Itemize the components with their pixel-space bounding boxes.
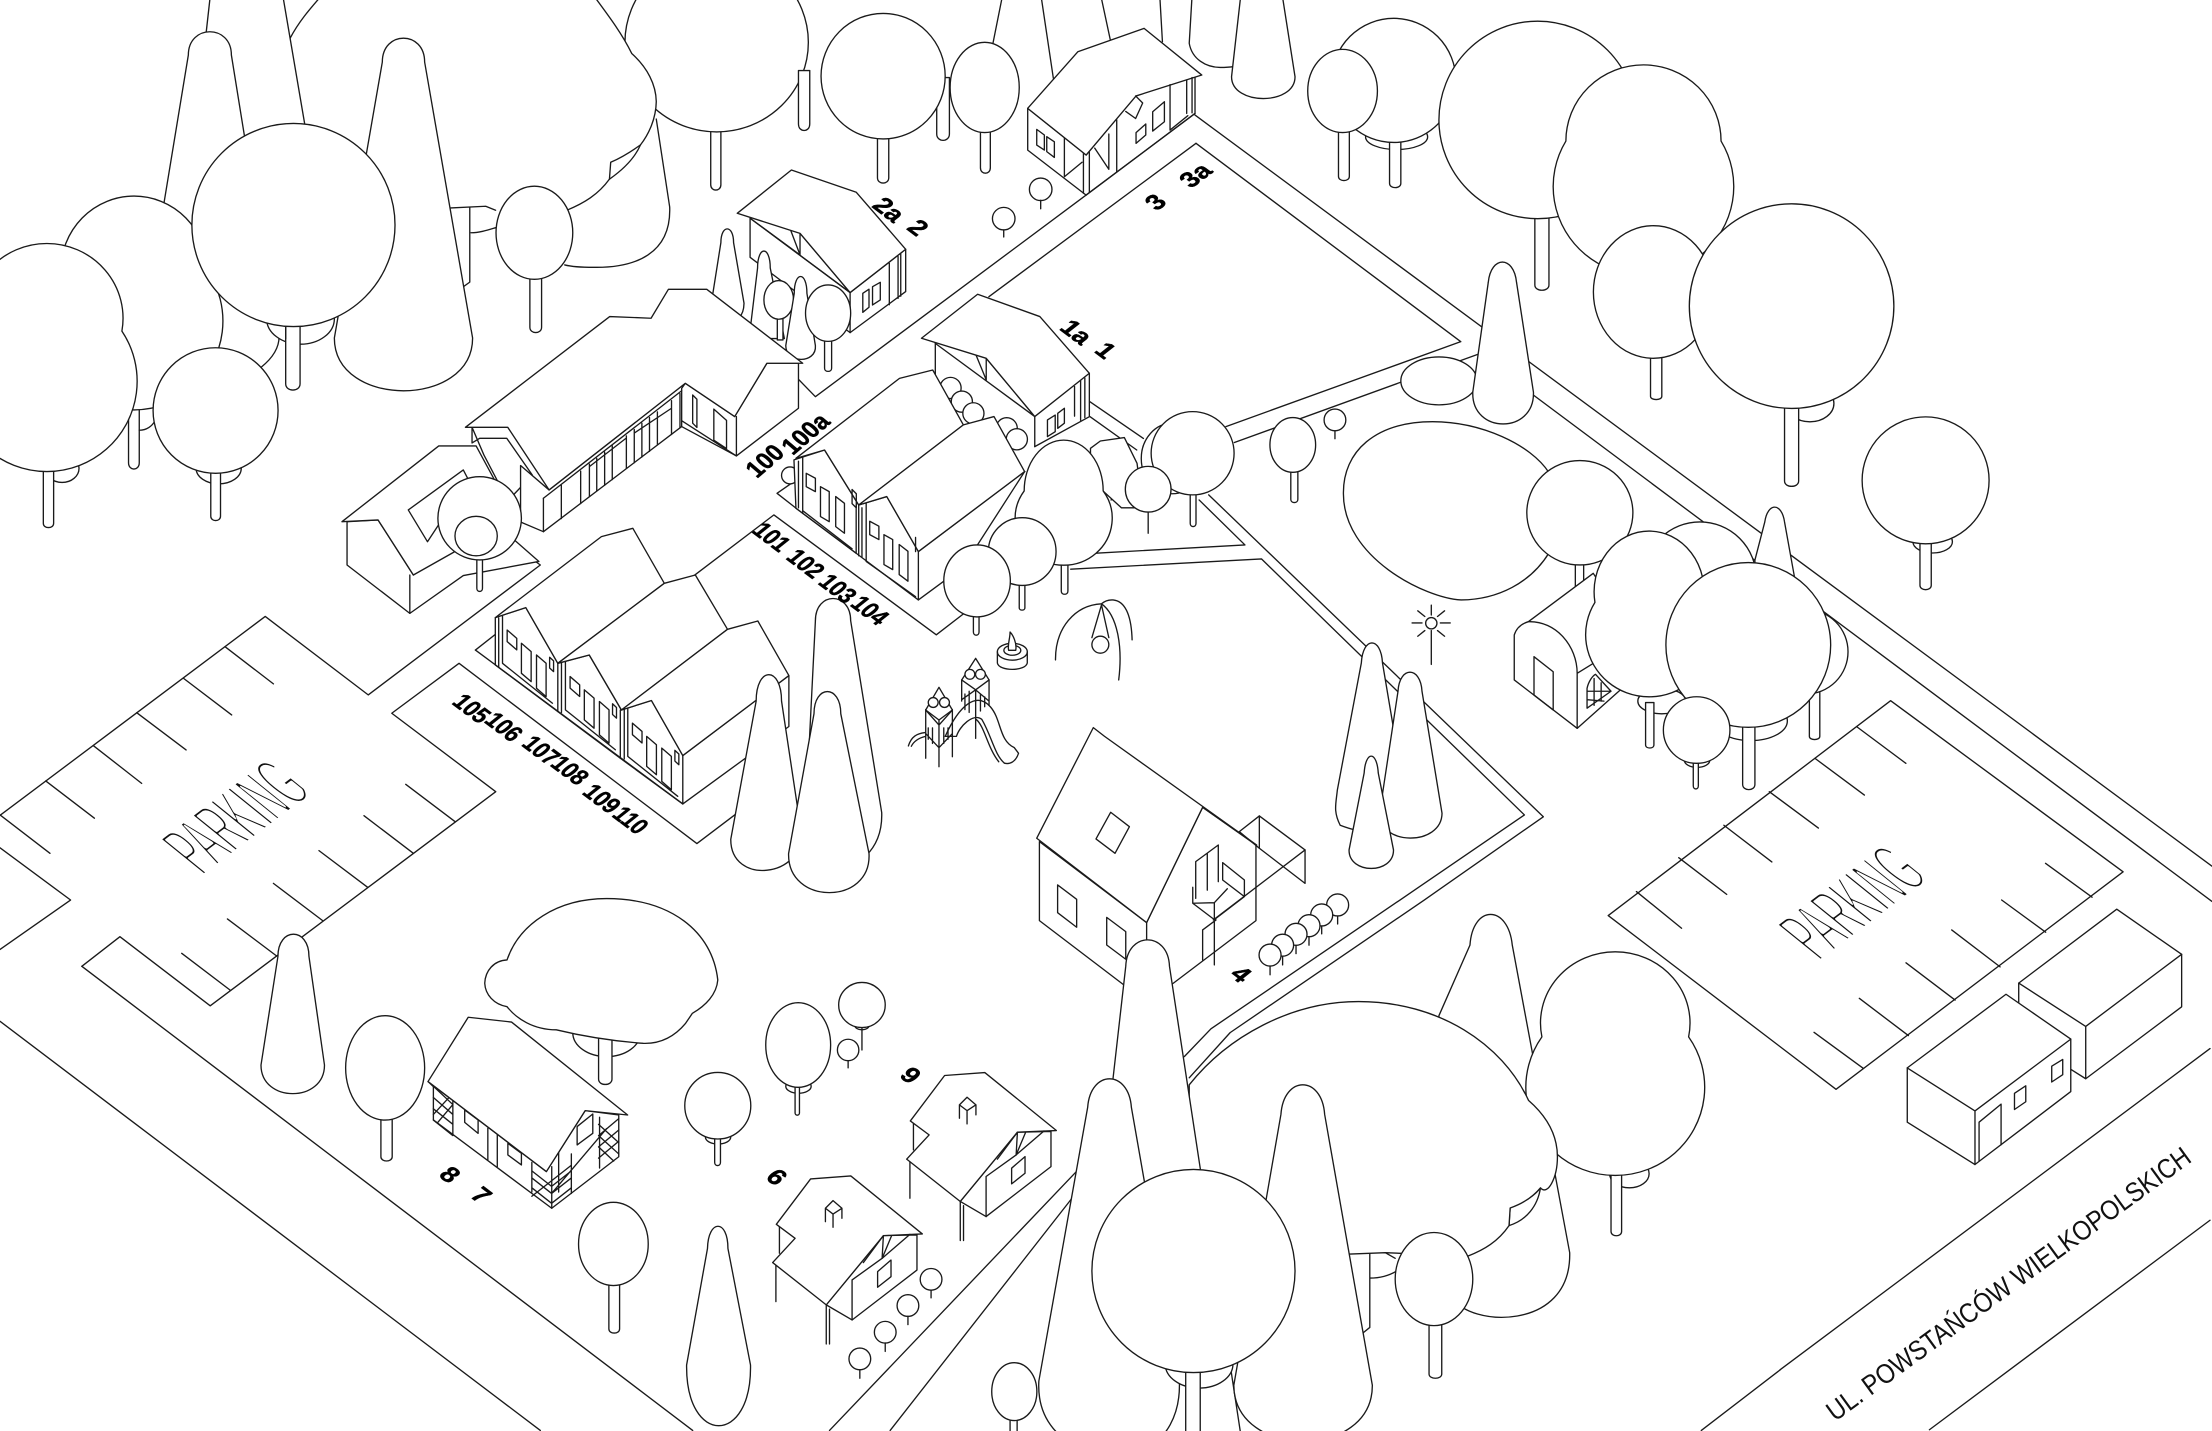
tree bbox=[579, 1202, 648, 1333]
pond behind cone bbox=[1401, 357, 1477, 405]
trees bottom right bbox=[992, 914, 1705, 1431]
tree left of house 8 bbox=[346, 1016, 425, 1161]
house 7 and 8 bbox=[428, 1017, 628, 1208]
label 9: 9 bbox=[894, 1063, 927, 1089]
cloud tree bbox=[1015, 440, 1112, 594]
trees centre right small bbox=[1270, 409, 1633, 600]
tree bbox=[685, 1072, 751, 1166]
cloud tree bbox=[1526, 952, 1705, 1236]
tree small bbox=[1663, 697, 1730, 789]
roof bbox=[737, 170, 906, 293]
tree bbox=[1862, 417, 1989, 590]
tree front left bbox=[0, 243, 137, 528]
bushes by house 1 bbox=[935, 377, 1027, 450]
fountain bbox=[997, 632, 1027, 669]
windows bbox=[465, 1110, 521, 1167]
door bbox=[1979, 1104, 2001, 1161]
roof bbox=[465, 289, 803, 490]
tree bbox=[766, 1003, 831, 1115]
tree bbox=[1308, 49, 1377, 181]
cone bbox=[749, 251, 784, 339]
back box bbox=[2019, 909, 2182, 1079]
lamp bbox=[1055, 600, 1132, 680]
unit details 3 bbox=[628, 709, 683, 804]
tree oval bbox=[950, 42, 1019, 173]
cone tall bbox=[1072, 940, 1241, 1431]
cone by road junction bbox=[1473, 262, 1533, 424]
tree small bbox=[1125, 466, 1171, 533]
label 8: 8 bbox=[433, 1162, 466, 1188]
label 4: 4 bbox=[1224, 962, 1257, 988]
frame lines bbox=[750, 218, 850, 333]
oval tree bbox=[1270, 418, 1316, 503]
playground bbox=[908, 658, 1019, 767]
tree bbox=[944, 545, 1010, 635]
cone right bbox=[1234, 1085, 1372, 1431]
unit details 1 bbox=[796, 457, 859, 556]
roof unit 2 bbox=[558, 575, 728, 710]
cone behind bbox=[1755, 507, 1794, 621]
tree back bbox=[1141, 423, 1203, 494]
label 106: 106 bbox=[478, 708, 528, 746]
house 1 and 1a bbox=[921, 294, 1089, 447]
side walls bbox=[521, 363, 798, 532]
trees top right bbox=[1308, 18, 1989, 590]
cone by parking bbox=[261, 934, 324, 1094]
tree bbox=[1666, 563, 1831, 790]
window bbox=[878, 1260, 891, 1287]
cloud tree bbox=[1586, 531, 1713, 748]
walls bbox=[495, 608, 789, 804]
side boxes bbox=[1907, 909, 2182, 1165]
label 100a: 100a bbox=[776, 408, 837, 460]
tree bbox=[837, 1039, 859, 1068]
tree bbox=[764, 281, 794, 340]
cone front bbox=[789, 692, 869, 893]
chimney bbox=[825, 1201, 842, 1227]
cone edges top bbox=[992, 0, 1162, 78]
tower front bbox=[926, 687, 952, 720]
roof bbox=[1037, 728, 1257, 923]
house 100 and 100a bbox=[465, 289, 803, 532]
roof back unit bbox=[796, 370, 963, 505]
annex connector bbox=[472, 427, 532, 501]
chimney bbox=[959, 1097, 976, 1124]
walls bbox=[794, 450, 1025, 600]
pond shape bbox=[1343, 422, 1549, 600]
lattice left bbox=[433, 1086, 453, 1136]
tree bbox=[1593, 226, 1713, 400]
houses 105 to 110 bbox=[475, 528, 789, 804]
small trees by house 3 bbox=[992, 178, 1052, 237]
cloud tree underside bbox=[609, 145, 640, 179]
window bbox=[1012, 1157, 1025, 1184]
walls bbox=[826, 1235, 917, 1320]
roof bbox=[907, 1073, 1056, 1201]
tree round bbox=[821, 13, 945, 183]
tree bbox=[839, 982, 885, 1050]
trees central cluster bbox=[944, 412, 1234, 635]
cones centre right bbox=[1336, 643, 1442, 868]
trees by house 2 bbox=[712, 229, 851, 371]
cone tree left bbox=[151, 32, 268, 282]
cloud tree top left bbox=[290, 0, 656, 210]
label 100: 100 bbox=[740, 440, 790, 483]
house 9 bbox=[907, 1073, 1056, 1241]
label 3: 3 bbox=[1139, 190, 1173, 215]
tree large bbox=[1439, 21, 1636, 290]
large cloud tree bbox=[1189, 1002, 1557, 1333]
small building behind bbox=[1090, 438, 1143, 508]
gable bbox=[863, 1234, 910, 1263]
parking label right: PARKING bbox=[1760, 831, 1945, 974]
label 2: 2 bbox=[901, 215, 934, 241]
cones by houses 105 to 110 bbox=[731, 598, 882, 893]
label 102: 102 bbox=[780, 545, 830, 583]
label 6: 6 bbox=[760, 1164, 793, 1190]
cone back bbox=[1439, 914, 1570, 1317]
small tree behind bbox=[782, 467, 798, 484]
tree large bbox=[192, 123, 395, 390]
window right bbox=[559, 1114, 600, 1192]
sunburst lamp bbox=[1412, 605, 1450, 664]
label 110: 110 bbox=[606, 802, 654, 839]
skylight bbox=[1096, 812, 1129, 853]
cone top right bbox=[1232, 0, 1295, 99]
tree behind bbox=[1643, 522, 1756, 635]
label 105: 105 bbox=[446, 690, 496, 728]
roof front unit bbox=[859, 417, 1025, 552]
cone small top bbox=[1189, 0, 1256, 67]
label 101: 101 bbox=[746, 518, 796, 557]
house 4 bbox=[1037, 728, 1305, 1002]
parking label left: PARKING bbox=[143, 745, 329, 888]
building arched bbox=[1514, 573, 1651, 728]
walls bbox=[428, 1082, 619, 1208]
small trees bottom centre bbox=[579, 982, 885, 1426]
tree bbox=[1332, 18, 1456, 188]
front box bbox=[1907, 994, 2071, 1165]
walls bbox=[960, 1132, 1051, 1217]
tree small left bbox=[153, 348, 278, 521]
slide bbox=[945, 700, 1019, 764]
walls bbox=[347, 520, 539, 613]
cone bbox=[712, 229, 744, 321]
parking left bbox=[0, 647, 455, 990]
parking stripes left bbox=[0, 647, 455, 990]
trees top centre bbox=[798, 0, 1295, 237]
sapling row bbox=[1259, 894, 1349, 975]
roof bbox=[773, 1176, 922, 1305]
cone bbox=[786, 276, 815, 359]
annex building bbox=[342, 446, 539, 613]
end wall details bbox=[543, 383, 736, 532]
saplings below house 6 bbox=[849, 1268, 942, 1378]
unit details 1 bbox=[499, 616, 561, 712]
roof bbox=[1028, 28, 1202, 155]
cloud tree bottom centre bbox=[485, 899, 718, 1084]
roof unit 3 bbox=[621, 621, 789, 756]
windows and frame bbox=[1037, 78, 1195, 195]
parking stripes right bbox=[1636, 727, 2092, 1068]
tree bbox=[1527, 461, 1633, 587]
tree top centre bbox=[625, 0, 808, 190]
tree large bbox=[1689, 204, 1894, 486]
frame bbox=[935, 343, 1085, 447]
label 108: 108 bbox=[544, 751, 595, 790]
roof bbox=[342, 446, 515, 575]
walls bbox=[1039, 807, 1256, 1002]
tree front bbox=[1092, 1169, 1295, 1431]
label 103: 103 bbox=[812, 570, 862, 608]
label 1a: 1a bbox=[1054, 315, 1099, 350]
tree left back bbox=[45, 196, 223, 469]
gable bbox=[997, 1131, 1044, 1159]
windows bbox=[1047, 408, 1064, 437]
roof bbox=[428, 1017, 628, 1172]
cone tree back right bbox=[536, 0, 670, 276]
label 104: 104 bbox=[844, 591, 895, 630]
roof bbox=[921, 294, 1089, 417]
sapling bbox=[1324, 409, 1346, 439]
label 1: 1 bbox=[1089, 338, 1122, 364]
trees top left background bbox=[0, 0, 808, 528]
tree right back bbox=[1763, 609, 1848, 740]
windows bbox=[863, 254, 901, 312]
parking right bbox=[1608, 701, 2123, 1089]
cloud tree bbox=[1553, 65, 1734, 275]
tree small oval bbox=[1395, 1233, 1473, 1378]
label 2a: 2a bbox=[866, 193, 911, 228]
cone left bbox=[731, 675, 801, 870]
unit details 2 bbox=[565, 662, 624, 759]
label 3a: 3a bbox=[1173, 158, 1219, 192]
flame bbox=[1008, 632, 1016, 650]
lattice front bbox=[532, 1129, 607, 1208]
building number labels bbox=[433, 158, 1257, 1208]
tower back bbox=[962, 658, 989, 690]
lattice right bbox=[599, 1119, 619, 1161]
house 3 and 3a bbox=[1028, 28, 1202, 195]
tree front of annex bbox=[438, 477, 521, 591]
house 2 and 2a bbox=[737, 170, 906, 333]
roof inset bbox=[408, 470, 468, 542]
roof unit 1 bbox=[495, 528, 664, 663]
ladder bbox=[908, 733, 925, 746]
cone tree tall bbox=[334, 38, 473, 391]
left windows bbox=[1058, 885, 1147, 959]
balcony bbox=[1193, 845, 1244, 965]
cone left bbox=[1039, 1079, 1179, 1431]
tree main bbox=[1151, 412, 1234, 527]
label 107: 107 bbox=[516, 731, 566, 770]
side awning bbox=[1239, 816, 1305, 883]
tree behind arc bbox=[261, 336, 279, 367]
houses 101 to 104 bbox=[782, 370, 1025, 600]
back cone edges bbox=[206, 0, 305, 124]
walls bbox=[935, 343, 1089, 447]
label 109: 109 bbox=[576, 780, 627, 818]
windows bbox=[2014, 1059, 2063, 1110]
cone back bbox=[804, 598, 882, 875]
unit details 2 bbox=[862, 504, 918, 600]
cluster right of centre bbox=[1514, 507, 1848, 790]
walls bbox=[1028, 75, 1195, 195]
tree bottom small bbox=[992, 1363, 1037, 1431]
tree bbox=[988, 518, 1056, 610]
plot edge bbox=[475, 633, 497, 650]
long wall openings bbox=[543, 391, 682, 519]
cone bbox=[687, 1226, 751, 1426]
house 6 bbox=[773, 1176, 922, 1344]
tree bbox=[806, 285, 851, 371]
trunks back bbox=[798, 71, 810, 130]
cloud tree trunk bbox=[460, 207, 496, 289]
label 7: 7 bbox=[464, 1183, 497, 1208]
tree near house bbox=[496, 186, 573, 333]
parking outline right bbox=[1608, 701, 2123, 1089]
walls bbox=[750, 218, 906, 333]
